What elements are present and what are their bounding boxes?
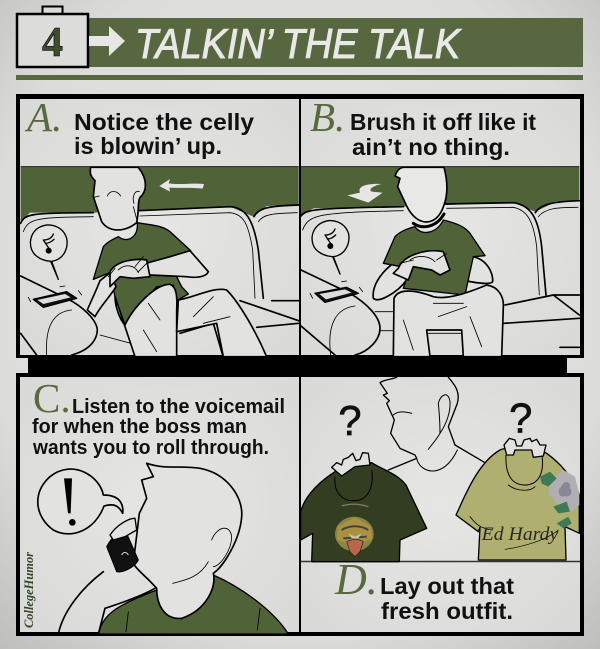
- hand: [332, 453, 370, 476]
- tiger graphic: [335, 504, 374, 557]
- green t-shirt: [456, 438, 579, 560]
- panel C: [21, 375, 288, 634]
- arm: [58, 572, 155, 634]
- panel C caption: C.: [33, 375, 71, 421]
- panel B caption: ain’t no thing.: [352, 134, 510, 160]
- CollegeHumor logo: CollegeHumor: [21, 551, 36, 628]
- flowers: [540, 470, 579, 528]
- panel A illustration: [21, 167, 299, 357]
- wall band: [21, 167, 299, 222]
- panel C caption: for when the boss man: [32, 416, 247, 438]
- icon: exclamation bubble: [38, 469, 123, 534]
- title bar: [88, 18, 583, 67]
- panel C caption: [32, 375, 285, 459]
- icon: ringing phone: [28, 286, 82, 307]
- comic frame: [16, 94, 584, 636]
- dark t-shirt: [301, 453, 427, 562]
- panel D caption: fresh outfit.: [381, 598, 513, 624]
- panel A: [21, 94, 299, 357]
- panel B caption: [310, 94, 536, 160]
- question marks: ?: [338, 397, 362, 444]
- header: [16, 6, 583, 80]
- panel C illustration: [38, 463, 288, 634]
- panel A caption: is blowin’ up.: [74, 133, 222, 159]
- question marks: ?: [509, 394, 532, 441]
- panel A caption: Notice the celly: [74, 109, 254, 135]
- question marks: [338, 394, 532, 444]
- person: [87, 167, 267, 357]
- sofa: [21, 205, 299, 355]
- panel B caption: Brush it off like it: [350, 109, 536, 135]
- icon: music bubble: [312, 221, 349, 274]
- icon: briefcase with number 4: [17, 6, 88, 67]
- icon: briefcase with number 4: 4: [42, 20, 63, 66]
- panel A caption: A.: [24, 94, 62, 140]
- panel B caption: B.: [310, 94, 345, 140]
- panel D illustration: [301, 377, 579, 562]
- panel D caption: Lay out that: [380, 573, 514, 599]
- panel D caption: [301, 555, 580, 624]
- shirt: [98, 575, 288, 634]
- panel D: [301, 377, 580, 624]
- icon: music bubble: [30, 225, 67, 279]
- panel B illustration: [301, 167, 579, 357]
- icon: ringing phone: [310, 281, 363, 302]
- panel C caption: wants you to roll through.: [32, 437, 269, 459]
- title: TALKIN’ THE TALK: [135, 20, 462, 67]
- hand: [504, 438, 546, 457]
- panel D caption: D.: [334, 555, 378, 604]
- head: [133, 463, 242, 618]
- header rule: [16, 75, 583, 80]
- arrow: [89, 26, 125, 56]
- panel C caption: Listen to the voicemail: [72, 396, 285, 418]
- icon: phone: [107, 518, 138, 572]
- person: [373, 167, 503, 357]
- panel A caption: [24, 94, 254, 159]
- arrow: [159, 179, 204, 192]
- person: [380, 377, 485, 471]
- arrow: [347, 184, 383, 203]
- panel B: [301, 94, 579, 357]
- wall band: [301, 167, 579, 216]
- sofa: [301, 201, 579, 355]
- Ed Hardy logo: Ed Hardy: [481, 524, 559, 545]
